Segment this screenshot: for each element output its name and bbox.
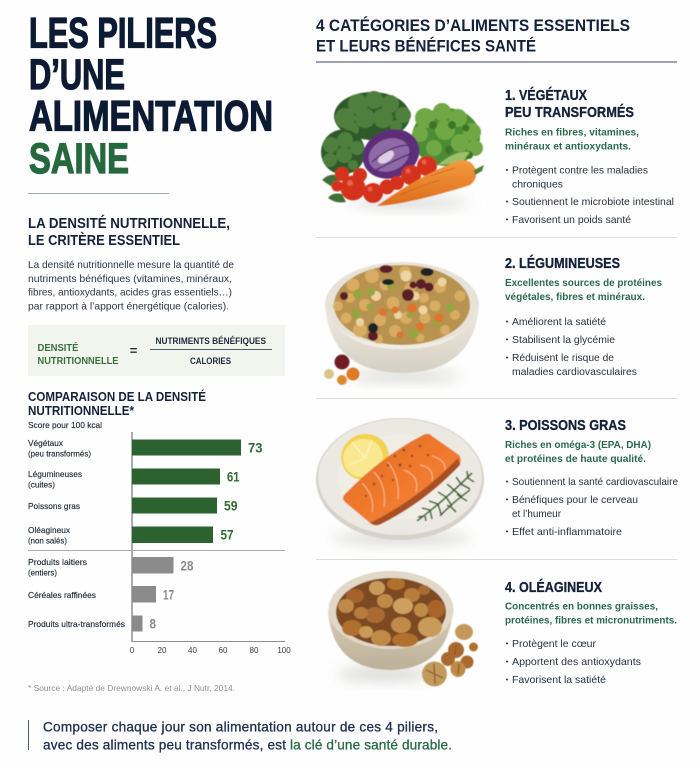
formula fraction: NUTRIMENTS BÉNÉFIQUES [156, 336, 266, 347]
conclusion callout: avec des aliments peu transformés, est [43, 738, 286, 752]
carrot [377, 160, 484, 206]
title: D’UNE [29, 51, 125, 99]
formula fraction [150, 336, 272, 367]
text block: definition: La densité nutritionnelle mesure la quantité de [28, 259, 234, 271]
section subtitle: minéraux et antioxydants. [505, 140, 631, 152]
section bullets: Améliorent la satiété [512, 316, 606, 328]
bar values: 28 [180, 558, 194, 574]
section bullets: Favorisent un poids santé [512, 214, 631, 226]
panel: nuts [328, 571, 677, 686]
section subtitle: Excellentes sources de protéines [505, 277, 662, 289]
section title: 3. POISSONS GRAS [505, 418, 626, 434]
right column heading: ET LEURS BÉNÉFICES SANTÉ [316, 36, 536, 56]
text block: definition: par rapport à l’apport énergétique (calories). [28, 300, 229, 312]
title: SAINE [29, 135, 129, 183]
bar values: 57 [220, 526, 234, 542]
axis ticks: 100 [277, 646, 291, 655]
section title [505, 87, 634, 121]
section subtitle: Concentrés en bonnes graisses, [505, 600, 658, 612]
right column heading [316, 16, 677, 62]
section title: 1. VÉGÉTAUX [505, 87, 587, 104]
bar labels: Légumineuses [28, 469, 82, 479]
section bullets: Effet anti-inflammatoire [512, 526, 622, 538]
red cabbage [355, 121, 427, 187]
bar values: 61 [227, 468, 240, 484]
right column heading: 4 CATÉGORIES D’ALIMENTS ESSENTIELS [316, 16, 630, 35]
section bullets [506, 638, 641, 686]
section title: 4. OLÉAGINEUX [505, 579, 602, 596]
bar chart: nutrient density comparison [28, 389, 291, 655]
text block: definition: nutriments bénéfiques (vitamines, minéraux, [28, 273, 232, 285]
chart heading: COMPARAISON DE LA DENSITÉ [28, 389, 206, 404]
section subtitle: Riches en fibres, vitamines, [505, 126, 639, 138]
title [29, 10, 273, 183]
conclusion callout: Composer chaque jour son alimentation autour de ces 4 piliers, [43, 720, 438, 734]
bar labels: Produits ultra-transformés [28, 619, 125, 629]
formula label [38, 341, 119, 367]
bars: grey [132, 557, 174, 632]
section subtitle: végétales, fibres et minéraux. [505, 291, 645, 303]
loose legumes [324, 354, 360, 385]
axis ticks: 0 [130, 646, 135, 655]
illustration: bowl of walnuts [328, 571, 478, 686]
section bullets: Soutiennent le microbiote intestinal [512, 196, 674, 208]
axis ticks: 60 [219, 646, 228, 655]
text block: definition [28, 259, 234, 312]
bar values: 73 [248, 440, 263, 456]
section bullets: maladies cardiovasculaires [512, 366, 637, 378]
section bullets [506, 316, 637, 378]
section bullets: Apportent des antioxydants [512, 656, 641, 668]
rosemary [417, 471, 474, 521]
section subtitle [505, 439, 651, 465]
section bullets: Stabilisent la glycémie [512, 334, 615, 346]
salmon [343, 434, 461, 525]
broccoli [321, 91, 411, 202]
bar labels: (entiers) [28, 568, 57, 578]
panel: formula [28, 325, 285, 376]
conclusion callout: la clé d’une santé durable. [290, 738, 452, 752]
section bullets [506, 476, 678, 538]
section bullets: Protègent le cœur [512, 638, 596, 650]
axis ticks [130, 646, 291, 655]
section bullets: Soutiennent la santé cardiovasculaire [512, 476, 678, 488]
bar labels: (cuites) [28, 480, 55, 490]
section bullets: chroniques [512, 178, 563, 190]
bar values [150, 440, 263, 632]
formula label: NUTRITIONNELLE [38, 356, 119, 367]
section bullets [506, 164, 674, 226]
bar labels: Produits laitiers [28, 557, 87, 567]
chart heading [28, 389, 206, 418]
bar labels: (non salés) [28, 536, 67, 546]
section subtitle [505, 126, 639, 152]
bar values: 8 [150, 616, 156, 632]
chart subtitle: Score pour 100 kcal [28, 420, 102, 430]
source note: * Source : Adapté de Drewnowski A. et al., J Nutr, 2014. [28, 683, 235, 693]
bar labels: (peu transformés) [28, 448, 91, 458]
bars: green [132, 440, 241, 543]
heading: nutrient density [28, 215, 230, 249]
section bullets: Protègent contre les maladies [512, 164, 648, 176]
axis ticks: 80 [250, 646, 259, 655]
illustration: salmon plate [316, 418, 484, 544]
formula label: DENSITÉ [38, 341, 79, 354]
illustration: bowl of legumes [324, 262, 479, 385]
section subtitle [505, 600, 677, 626]
lemon [334, 426, 396, 488]
section subtitle: protéines, fibres et micronutriments. [505, 614, 677, 626]
section subtitle: Riches en oméga-3 (EPA, DHA) [505, 439, 651, 451]
bar labels: Végétaux [28, 438, 64, 448]
panel: vegetables [321, 87, 674, 226]
section bullets: Réduisent le risque de [512, 352, 614, 364]
heading: nutrient density: LA DENSITÉ NUTRITIONNELLE, [28, 215, 230, 232]
section title: PEU TRANSFORMÉS [505, 104, 634, 121]
title: LES PILIERS [29, 10, 217, 58]
section bullets: et l’humeur [512, 508, 561, 520]
heading: nutrient density: LE CRITÈRE ESSENTIEL [28, 232, 180, 249]
bar labels: Céréales raffinées [28, 590, 96, 600]
bar labels [28, 438, 125, 629]
section subtitle: et protéines de haute qualité. [505, 453, 646, 465]
bar labels: Oléagineux [28, 525, 71, 535]
equals sign: = [130, 343, 138, 358]
bar values: 59 [224, 498, 238, 514]
panel: fatty fish [316, 418, 678, 544]
section bullets: Favorisent la satiété [512, 674, 606, 686]
illustration: vegetables [321, 91, 484, 208]
loose walnuts [422, 624, 478, 686]
panel: legumes [324, 255, 662, 385]
formula fraction: CALORIES [190, 356, 231, 367]
conclusion callout [28, 720, 452, 752]
bar labels: Poissons gras [28, 501, 80, 511]
axis ticks: 20 [158, 646, 167, 655]
tomatoes [332, 156, 437, 203]
bar values: 17 [163, 586, 174, 602]
title: ALIMENTATION [29, 92, 273, 140]
chart heading: NUTRITIONNELLE* [28, 403, 135, 418]
lettuce [412, 103, 483, 166]
section title: 2. LÉGUMINEUSES [505, 255, 620, 272]
section subtitle [505, 277, 662, 303]
axis ticks: 40 [188, 646, 197, 655]
section bullets: Bénéfiques pour le cerveau [512, 494, 638, 506]
text block: definition: fibres, antioxydants, acides gras essentiels…) [28, 286, 232, 298]
